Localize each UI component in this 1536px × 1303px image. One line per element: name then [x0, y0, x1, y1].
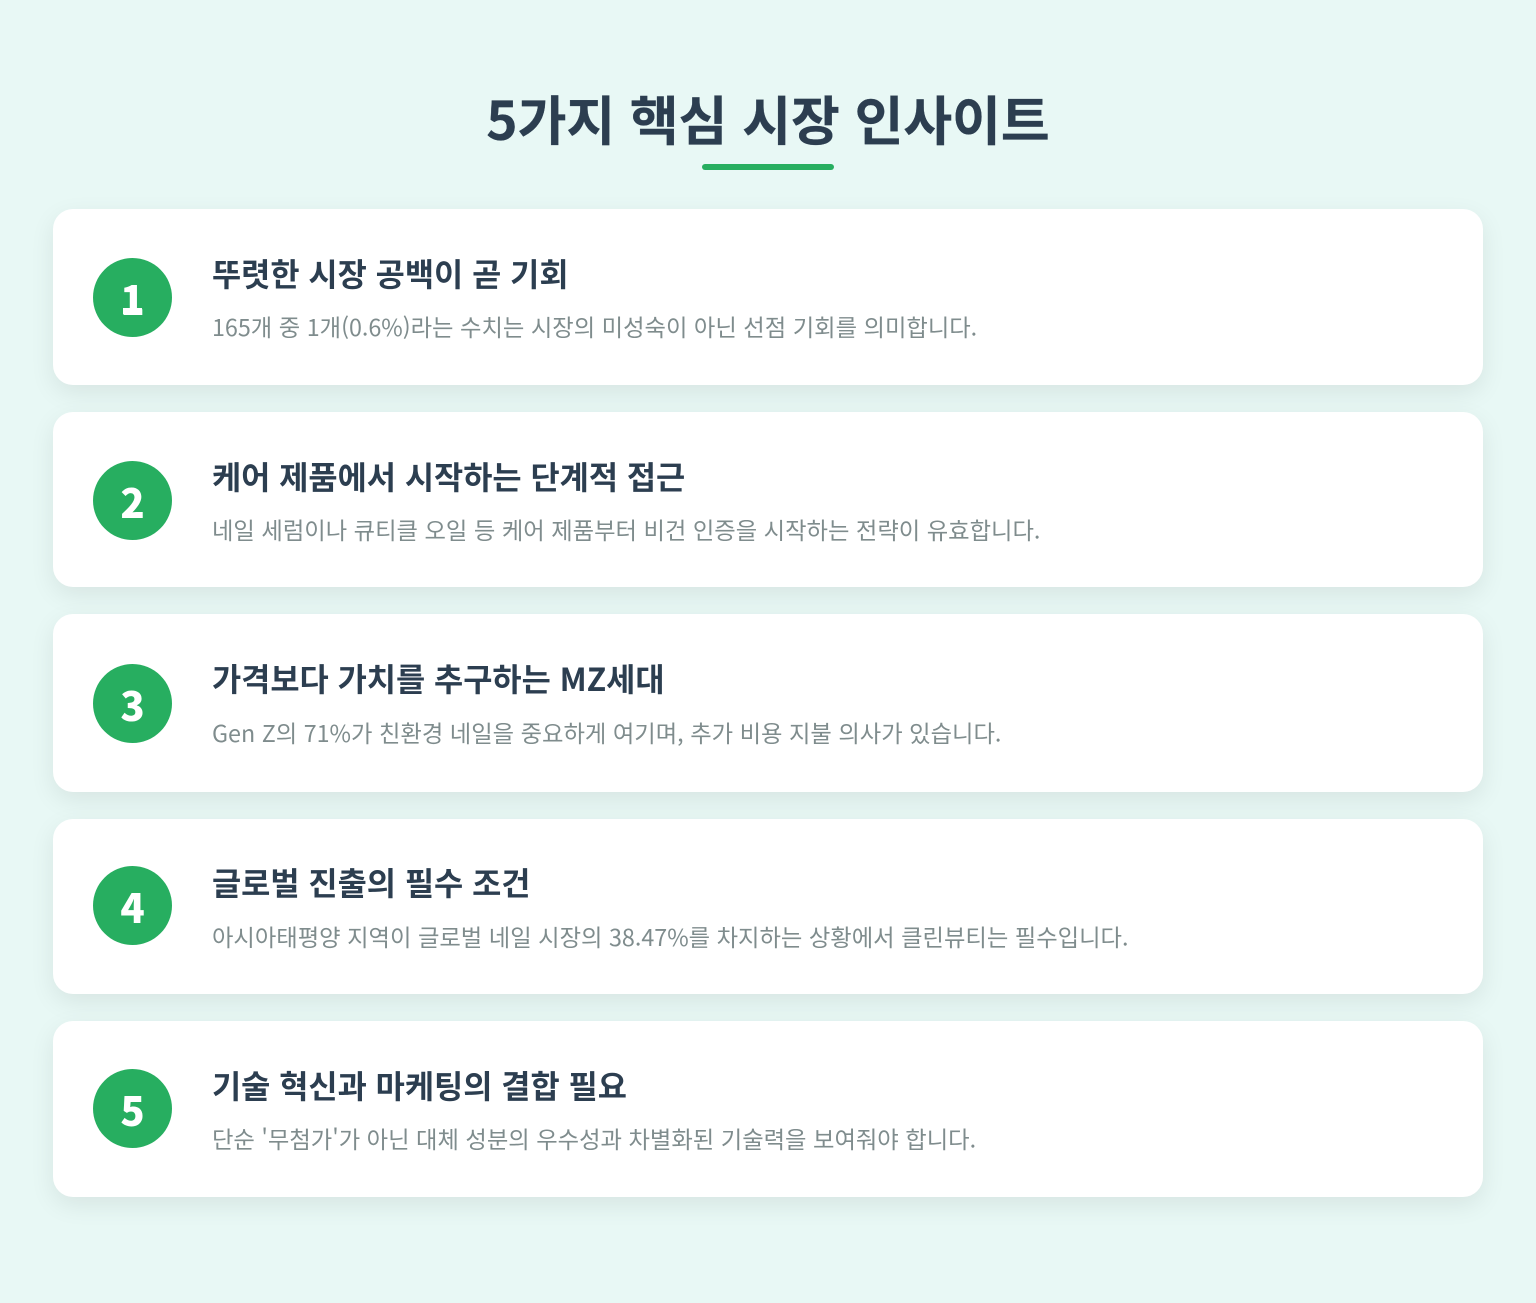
description 4: 아시아태평양 지역이 글로벌 네일 시장의 38.47%를 차지하는 상황에서 클린뷰티는 필수입니다.	[212, 919, 1128, 953]
number badge 2: 2	[120, 472, 145, 530]
heading 5: 기술 혁신과 마케팅의 결합 필요	[212, 1062, 627, 1108]
number badge 2	[93, 461, 172, 540]
number badge 5	[93, 1069, 172, 1148]
heading 1: 뚜렷한 시장 공백이 곧 기회	[212, 250, 569, 296]
description 3: Gen Z의 71%가 친환경 네일을 중요하게 여기며, 추가 비용 지불 의사가 있습니다.	[212, 715, 1001, 749]
panel: insight 1	[53, 209, 1483, 385]
description 5: 단순 '무첨가'가 아닌 대체 성분의 우수성과 차별화된 기술력을 보여줘야 합니다.	[212, 1121, 976, 1155]
number badge 1	[93, 258, 172, 337]
panel: insight 4	[53, 819, 1483, 994]
heading 3: 가격보다 가치를 추구하는 MZ세대	[212, 655, 664, 701]
number badge 5: 5	[120, 1080, 145, 1138]
number badge 3	[93, 664, 172, 743]
heading 2: 케어 제품에서 시작하는 단계적 접근	[212, 452, 685, 498]
number badge 3: 3	[120, 675, 145, 733]
number badge 1: 1	[120, 269, 145, 327]
heading 4: 글로벌 진출의 필수 조건	[212, 859, 530, 905]
title: 5가지 핵심 시장 인사이트	[486, 80, 1050, 156]
number badge 4	[93, 866, 172, 945]
title underline	[702, 164, 834, 170]
description 2: 네일 세럼이나 큐티클 오일 등 케어 제품부터 비건 인증을 시작하는 전략이 유효합니다.	[212, 512, 1040, 546]
panel: insight 3	[53, 614, 1483, 792]
panel: insight 5	[53, 1021, 1483, 1197]
description 1: 165개 중 1개(0.6%)라는 수치는 시장의 미성숙이 아닌 선점 기회를 의미합니다.	[212, 309, 977, 343]
number badge 4: 4	[120, 877, 145, 935]
panel: insight 2	[53, 412, 1483, 587]
